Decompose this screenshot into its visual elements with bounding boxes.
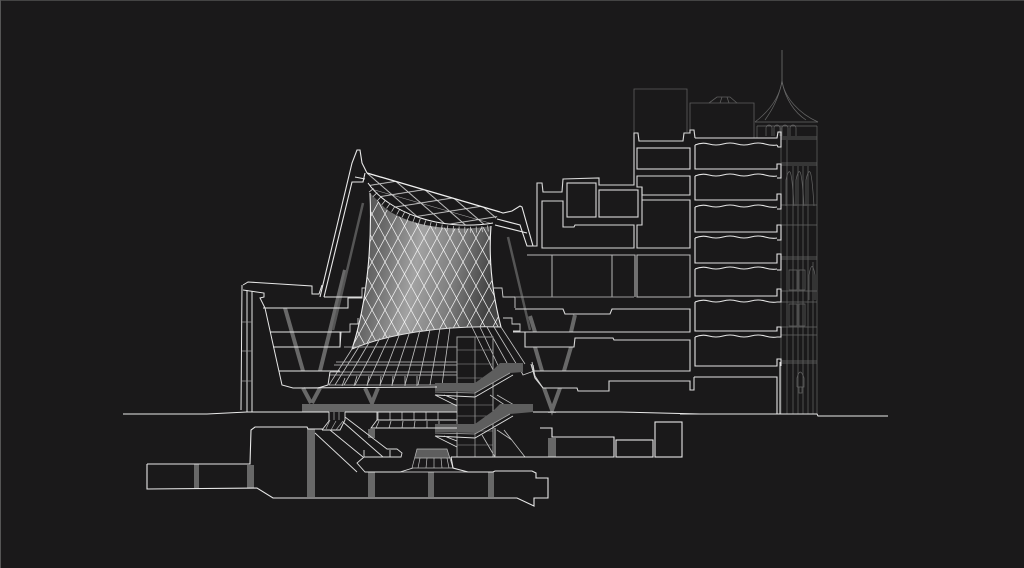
net canopy surface bbox=[352, 193, 501, 349]
lower cone grid bbox=[329, 327, 526, 457]
ground line bbox=[123, 362, 888, 416]
historic tower with spire bbox=[755, 50, 818, 414]
roof edge, upper left arm bbox=[320, 150, 533, 297]
right wing floor slabs bbox=[513, 255, 694, 391]
gray structural columns and diagonals bbox=[196, 203, 612, 497]
stair core tower bbox=[457, 337, 493, 457]
right office block floors with wavy ceilings bbox=[680, 132, 781, 414]
faint rooftop volumes bbox=[634, 89, 754, 138]
roof lattice bbox=[367, 173, 500, 230]
upper spiral stair bbox=[435, 363, 523, 406]
stepped terraces beside the net bbox=[340, 288, 543, 388]
lower fan light bbox=[412, 449, 453, 468]
basement outline bbox=[147, 422, 682, 506]
gray floor band under the cone bbox=[302, 404, 457, 412]
central stepped building rooms bbox=[532, 130, 695, 248]
lower spiral stair bbox=[435, 404, 533, 447]
left wing floor slabs bbox=[241, 282, 437, 412]
escalator block and lower lobby bbox=[315, 412, 457, 472]
